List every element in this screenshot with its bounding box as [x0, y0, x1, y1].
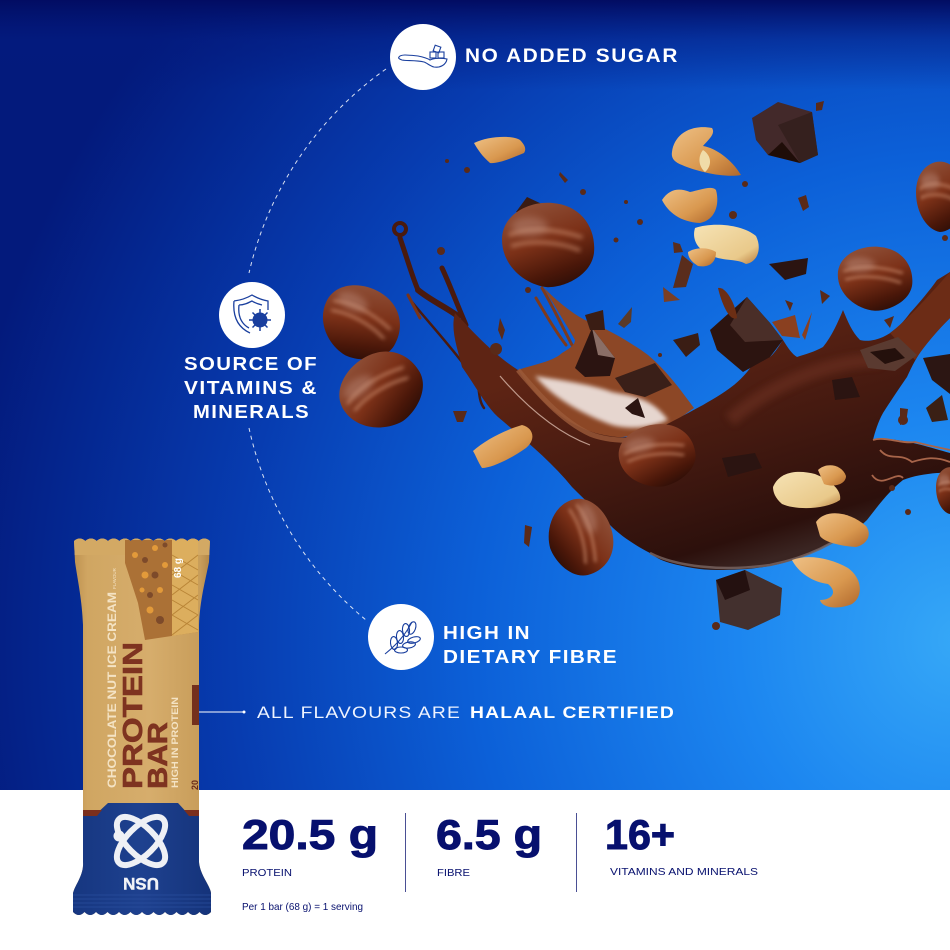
label: high in dietary fibre: DIETARY FIBRE	[443, 646, 618, 667]
brown strips	[83, 810, 199, 816]
divider	[405, 813, 406, 892]
benefit: no added sugar	[390, 24, 679, 90]
chocolate splash illustration	[309, 101, 950, 630]
label: source of vitamins and minerals: SOURCE OF	[184, 353, 318, 374]
stat: protein: 20.5 g	[242, 811, 378, 858]
top crimp	[74, 538, 210, 555]
dark splash body	[453, 272, 950, 570]
stat: fibre: 6.5 g	[436, 811, 542, 858]
glossy chocolate band	[518, 370, 662, 440]
benefit: dietary fibre	[368, 604, 618, 670]
protein title: PROTEIN	[117, 642, 148, 789]
wrapper gold	[70, 535, 215, 925]
label: high in dietary fibre	[443, 622, 618, 667]
bar title: BAR	[142, 722, 173, 789]
label: source of vitamins and minerals	[184, 353, 318, 422]
stat: vitamins and minerals: VITAMINS AND MINERALS	[610, 866, 758, 878]
stat: protein	[242, 811, 378, 913]
hazelnuts	[309, 162, 950, 584]
dotted arc connecting benefits	[249, 69, 386, 620]
body sheen	[730, 360, 880, 420]
chunk on top of hazelnut	[516, 197, 544, 216]
stat: vitamins and minerals: 16+	[605, 811, 675, 858]
icon: spoon with sugar cubes	[390, 24, 456, 90]
benefit: vitamins and minerals	[184, 282, 318, 422]
stat: vitamins and minerals	[605, 811, 758, 878]
halaal callout	[197, 704, 675, 722]
chocolate crumbs	[437, 101, 948, 630]
bottom crimp shading	[70, 895, 215, 907]
stat: fibre: FIBRE	[437, 867, 470, 879]
NSU logo	[109, 809, 173, 873]
product: protein bar package	[70, 535, 215, 925]
milk chocolate highlight	[535, 376, 668, 428]
side badge	[192, 685, 199, 790]
stat: protein: PROTEIN	[242, 867, 292, 879]
icon: shield with virus	[219, 282, 285, 348]
label: source of vitamins and minerals: VITAMINS &	[184, 377, 318, 398]
label: source of vitamins and minerals: MINERALS	[193, 401, 310, 422]
brand name upside down: USN	[123, 874, 159, 892]
upper right glossy stream	[890, 272, 950, 360]
glossy thin line	[500, 376, 590, 445]
side badge: 20	[190, 780, 200, 790]
high in protein text: HIGH IN PROTEIN	[170, 697, 180, 788]
halaal callout: HALAAL CERTIFIED	[470, 704, 675, 722]
white nutrition strip	[0, 790, 950, 950]
halaal callout: ALL FLAVOURS ARE	[257, 704, 461, 722]
food photo: 68 g	[173, 558, 184, 578]
label: no added sugar: NO ADDED SUGAR	[465, 46, 679, 67]
divider	[576, 813, 577, 892]
dark chocolate chunks	[575, 102, 950, 630]
milk chocolate lobe	[518, 288, 694, 440]
flavour text: CHOCOLATE NUT ICE CREAM	[107, 592, 119, 788]
thin left tendrils	[394, 223, 572, 408]
label: high in dietary fibre: HIGH IN	[443, 622, 531, 643]
flavour small label: FLAVOUR	[112, 567, 117, 589]
rim highlight	[650, 522, 860, 568]
blue base	[73, 803, 211, 915]
icon: wheat sprig	[368, 604, 434, 670]
food photo	[125, 540, 198, 640]
stat: fibre	[436, 811, 542, 879]
stat: protein: Per 1 bar (68 g) = 1 serving	[242, 901, 363, 913]
roasted nut pieces	[473, 127, 869, 607]
tangled glossy chocolate	[872, 439, 950, 481]
